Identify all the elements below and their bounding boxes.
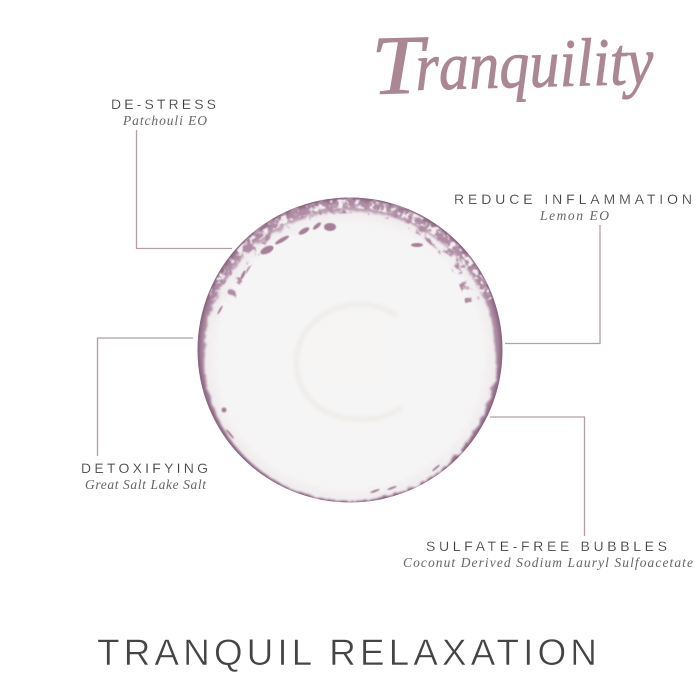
label: detoxifying: DETOXIFYING <box>81 460 208 476</box>
bath bomb upper blotches <box>222 200 478 300</box>
label: de-stress: DE-STRESS <box>111 96 216 112</box>
title: Tranquility <box>370 13 655 113</box>
heading: tranquil relaxation: TRANQUIL RELAXATION <box>97 632 597 673</box>
bath bomb speckles <box>217 221 440 494</box>
connector: de-stress <box>136 130 232 248</box>
connector: reduce inflammation <box>505 225 600 344</box>
label: reduce inflammation: Lemon EO <box>539 208 609 223</box>
title: Tranquility: T <box>370 19 430 113</box>
title: Tranquility: ranquility <box>414 23 655 105</box>
label: de-stress <box>111 96 216 128</box>
bath bomb <box>198 198 502 502</box>
label: reduce inflammation: REDUCE INFLAMMATION <box>454 191 692 207</box>
label: reduce inflammation <box>454 191 692 223</box>
label: detoxifying: Great Salt Lake Salt <box>85 477 207 492</box>
connector: sulfate-free bubbles <box>490 417 584 536</box>
bath bomb mottled rim <box>212 204 488 300</box>
connector: detoxifying <box>98 338 193 456</box>
label: detoxifying <box>81 460 208 492</box>
label: sulfate-free bubbles <box>403 538 693 570</box>
label: de-stress: Patchouli EO <box>122 113 207 128</box>
label: sulfate-free bubbles: Coconut Derived Sodium Lauryl Sulfoacetate <box>403 555 693 570</box>
bath bomb white body <box>204 211 496 501</box>
bath bomb embossed C mark <box>296 304 402 420</box>
label: sulfate-free bubbles: SULFATE-FREE BUBBLES <box>426 538 667 554</box>
